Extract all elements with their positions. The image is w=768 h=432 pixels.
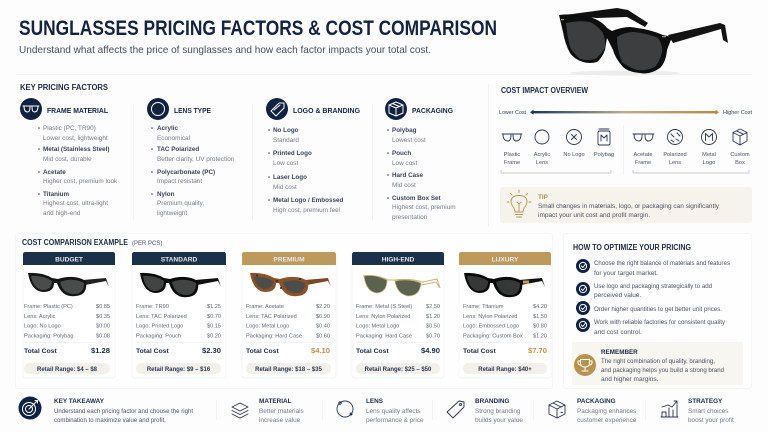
icon: glasses <box>20 98 42 120</box>
card: premium: Lens: TAC Polarized <box>246 314 297 320</box>
list: frame options <box>38 125 118 217</box>
card: high-end: $4.90 <box>421 346 440 355</box>
card: standard: Packaging: Pouch <box>136 334 181 340</box>
callout: tip: impact your unit cost and profit margin. <box>538 212 650 219</box>
footer strip: material: MATERIAL <box>259 398 292 405</box>
icon: light bulb <box>507 190 531 217</box>
card: premium: Packaging: Hard Case <box>246 334 302 340</box>
card: luxury: $1.50 <box>533 314 547 320</box>
icon: target <box>18 396 42 420</box>
card: high-end: Frame: Metal (S.Steel) <box>356 304 412 310</box>
list: packaging options: Mid cost <box>392 182 416 189</box>
card: high-end: $0.50 <box>426 324 440 330</box>
footer strip: lens: performance & price <box>366 417 424 424</box>
list: logo options: Printed Logo <box>273 150 312 157</box>
card: luxury: $7.70 <box>528 346 547 355</box>
footer strip: branding: BRANDING <box>475 398 509 405</box>
footer strip: key takeaway: combination to maximize value and profit. <box>54 417 166 424</box>
card: budget: BUDGET <box>55 256 83 263</box>
callout: remember: and higher margins. <box>601 376 659 383</box>
footer strip: lens: LENS <box>366 398 384 405</box>
heading: lens type: LENS TYPE <box>174 106 211 115</box>
icon: tag <box>266 98 288 120</box>
card: premium <box>242 252 336 378</box>
list: logo options: Metal Logo / Embossed <box>273 197 343 204</box>
card: standard: $0.20 <box>207 334 221 340</box>
card: budget: Frame: Plastic (PC) <box>24 304 73 310</box>
card: budget: Packaging: Polybag <box>24 334 73 340</box>
checklist: perceived value. <box>594 292 642 299</box>
callout: remember: The right combination of quality, branding, <box>601 358 715 365</box>
list: frame options: Lower cost, lightweight <box>43 135 108 142</box>
card: standard: Retail Range: $9 – $16 <box>147 367 211 373</box>
footer strip: packaging: Packaging enhances <box>577 408 636 415</box>
card: premium: $2.20 <box>316 304 330 310</box>
list: lens options: lightweight <box>157 210 187 217</box>
lower cost icons: Polybag <box>594 152 614 158</box>
higher cost icons: Acetate <box>634 152 652 158</box>
list: packaging options: Hard Case <box>392 172 424 179</box>
callout: remember: and packaging helps you build a strong brand <box>601 367 724 374</box>
card: budget: $0.85 <box>96 304 110 310</box>
list: logo options: High cost, premium feel <box>273 207 340 214</box>
panel: lens type <box>147 98 235 217</box>
card: high-end: HIGH-END <box>382 256 415 263</box>
heading: logo and branding: LOGO & BRANDING <box>293 106 360 115</box>
list: frame options: Higher cost, premium look <box>43 178 118 185</box>
panel: how to optimize your pricing <box>564 234 752 388</box>
card: premium: Frame: Acetate <box>246 304 284 310</box>
card: standard: Total Cost <box>136 348 169 355</box>
checklist: Order higher quantities to get better unit prices. <box>594 306 722 313</box>
card: luxury: $4.20 <box>533 304 547 310</box>
footer strip: packaging: customer experience <box>577 417 637 424</box>
list: frame options: Highest cost, ultra-light <box>43 200 108 207</box>
card: premium: $0.90 <box>316 314 330 320</box>
heading: frame material: FRAME MATERIAL <box>47 106 108 115</box>
card: standard: STANDARD <box>161 256 197 263</box>
higher cost icons <box>633 129 750 173</box>
heading: packaging: PACKAGING <box>412 106 453 115</box>
list: packaging options: Low cost <box>392 160 417 167</box>
list: packaging options: presentation <box>392 214 428 221</box>
icon: tag <box>447 401 464 418</box>
list: packaging options: Highest cost, premium <box>392 204 456 211</box>
list: lens options: Economical <box>157 135 190 142</box>
callout: remember <box>572 342 743 385</box>
footer strip: material: Better materials <box>259 408 304 415</box>
list: logo options: Mid cost <box>273 184 297 191</box>
card: luxury: Logo: Embossed Logo <box>463 324 519 330</box>
footer strip: branding: builds your value <box>475 417 523 424</box>
sunglasses: premium <box>250 273 331 296</box>
footer strip: strategy: Smart choices <box>688 408 728 415</box>
card: budget: Total Cost <box>24 348 57 355</box>
callout: remember: REMEMBER <box>601 349 638 356</box>
callout: tip: Small changes in materials, logo, or packaging can significantly <box>538 203 720 210</box>
list: lens options: Polycarbonate (PC) <box>157 169 215 176</box>
sunglasses: standard <box>140 273 221 297</box>
title: SUNGLASSES PRICING FACTORS & COST COMPARISON <box>19 17 497 40</box>
list: lens options: Acrylic <box>157 125 179 132</box>
checklist: for your target market. <box>594 270 658 277</box>
card: luxury: Frame: Titanium <box>463 304 504 310</box>
icon: growth chart <box>661 401 678 417</box>
list: packaging options: Polybag <box>392 127 417 134</box>
callout: tip <box>500 187 752 223</box>
card: premium: PREMIUM <box>273 256 305 263</box>
card: standard <box>132 252 226 378</box>
card: high-end: $0.70 <box>426 334 440 340</box>
heading: cost comparison example: COST COMPARISON EXAMPLE <box>22 238 129 247</box>
footer strip: material <box>232 398 304 424</box>
footer strip: key takeaway <box>18 396 193 424</box>
card: budget: Logo: No Logo <box>24 324 61 330</box>
footer strip: branding <box>447 398 523 424</box>
higher cost icons: Frame <box>635 160 651 166</box>
lower cost icons: Plastic <box>504 152 520 158</box>
list: frame options: Mid cost, durable <box>43 156 92 163</box>
card: high-end: Total Cost <box>356 348 389 355</box>
card: budget: $0.08 <box>96 334 110 340</box>
lower cost icons: Acrylic <box>534 152 550 158</box>
list: logo options: Low cost <box>273 160 298 167</box>
list: logo options: Laser Logo <box>273 174 307 181</box>
icon: lens <box>337 401 353 417</box>
card: luxury: LUXURY <box>492 256 519 263</box>
higher cost icons: Logo <box>703 160 715 166</box>
card: budget <box>23 252 115 378</box>
higher cost icons: Box <box>735 160 745 166</box>
card: luxury: Packaging: Custom Box <box>463 334 523 340</box>
card: luxury <box>459 252 551 378</box>
card: standard: Lens: TAC Polarized <box>136 314 187 320</box>
card: high-end: Packaging: Hard Case <box>356 334 412 340</box>
list: lens options: Impact resistant <box>157 178 202 185</box>
footer strip: lens: Lens quality affects <box>366 408 421 415</box>
card: standard: Frame: TR90 <box>136 304 169 310</box>
higher cost icons: Metal <box>702 152 716 158</box>
icon: box <box>549 401 565 418</box>
list: frame options: Metal (Stainless Steel) <box>43 146 110 153</box>
card: budget: Retail Range: $4 – $8 <box>37 367 98 373</box>
card: premium: Retail Range: $18 – $35 <box>255 367 323 373</box>
checklist <box>576 259 731 336</box>
sunglasses: budget <box>28 273 109 296</box>
list: logo options: Standard <box>273 137 299 144</box>
panel: packaging <box>385 98 456 221</box>
footer strip: key takeaway: Understand each pricing factor and choose the right <box>54 408 193 415</box>
card: luxury: $1.20 <box>533 334 547 340</box>
footer strip: strategy <box>661 398 734 424</box>
checklist: and cost control. <box>594 329 642 336</box>
lower cost icons: Frame <box>504 160 520 166</box>
card: luxury: Lens: Nylon Polarized <box>463 314 517 320</box>
card: high-end: Logo: Metal Logo <box>356 324 399 330</box>
heading: how to optimize: HOW TO OPTIMIZE YOUR PRICING <box>573 243 691 252</box>
card: high-end: Retail Range: $25 – $50 <box>365 367 432 373</box>
list: lens options: Better clarity, UV protection <box>157 156 235 163</box>
footer strip: strategy: STRATEGY <box>688 398 723 405</box>
card: premium: Total Cost <box>246 348 279 355</box>
icon: trophy <box>574 354 596 376</box>
panel: frame material <box>20 98 118 217</box>
icon: box <box>385 98 407 120</box>
card: standard: $2.30 <box>202 346 221 355</box>
list: packaging options: Custom Box Set <box>392 195 442 202</box>
footer strip: packaging <box>549 398 637 424</box>
card: budget: $0.00 <box>96 324 110 330</box>
card: luxury: Total Cost <box>463 348 496 355</box>
list: lens options <box>151 125 235 217</box>
card: luxury: Retail Range: $40+ <box>478 367 532 373</box>
higher cost icons: Polarized <box>663 152 687 158</box>
card: premium: $0.60 <box>316 334 330 340</box>
cost scale arrow: Higher Cost <box>723 110 752 116</box>
footer strip: branding: Strong branding <box>475 408 521 415</box>
footer strip: strategy: boost your profit <box>688 417 734 424</box>
sunglasses: luxury <box>464 273 545 297</box>
checklist: Use logo and packaging strategically to add <box>594 283 712 290</box>
heading: cost impact overview: COST IMPACT OVERVIEW <box>501 86 588 95</box>
cost scale arrow <box>499 110 752 116</box>
icon: lens <box>147 98 169 120</box>
list: logo options <box>268 127 343 214</box>
checklist: Choose the right balance of materials and features <box>594 260 731 267</box>
card: budget: $0.35 <box>96 314 110 320</box>
list: packaging options <box>387 127 456 221</box>
card: high-end: $1.20 <box>426 314 440 320</box>
list: frame options: Acetate <box>43 169 66 176</box>
card: premium: $4.10 <box>311 346 330 355</box>
cost scale arrow: Lower Cost <box>499 110 526 116</box>
footer strip: key takeaway: KEY TAKEAWAY <box>54 398 105 405</box>
sunglasses: high-end <box>363 276 440 296</box>
list: lens options: TAC Polarized <box>157 146 199 153</box>
list: lens options: Nylon <box>157 191 175 198</box>
list: frame options: Titanium <box>43 191 70 198</box>
card: high-end: Lens: Nylon Polarized <box>356 314 410 320</box>
card: premium: $0.40 <box>316 324 330 330</box>
list: lens options: Premium quality, <box>157 200 204 207</box>
list: logo options: No Logo <box>273 127 299 134</box>
panel: logo and branding <box>266 98 360 214</box>
list: packaging options: Lowest cost <box>392 137 426 144</box>
lower cost icons <box>501 129 614 173</box>
card: budget: $1.28 <box>91 346 110 355</box>
footer strip: packaging: PACKAGING <box>577 398 616 405</box>
footer strip: material: increase value <box>259 417 301 424</box>
list: frame options: and high-end <box>43 210 81 217</box>
icon: layers <box>232 403 248 418</box>
card: budget: Lens: Acrylic <box>24 314 56 320</box>
higher cost icons: Custom <box>730 152 750 158</box>
panel: cost impact overview <box>499 86 752 223</box>
callout: tip: TIP <box>538 194 549 201</box>
card: standard: $0.70 <box>207 314 221 320</box>
card: luxury: $0.80 <box>533 324 547 330</box>
list: frame options: Plastic (PC, TR90) <box>43 125 96 132</box>
per pcs note: (PER PCS) <box>132 241 162 247</box>
subtitle: Understand what affects the price of sunglasses and how each factor impacts your total cost. <box>19 45 431 56</box>
card: high-end <box>352 252 444 378</box>
higher cost icons: Lens <box>669 160 681 166</box>
lower cost icons: No Logo <box>563 152 585 158</box>
lower cost icons: Lens <box>536 160 548 166</box>
card: standard: $1.25 <box>207 304 221 310</box>
card: premium: Logo: Metal Logo <box>246 324 289 330</box>
card: high-end: $2.50 <box>426 304 440 310</box>
panel: cost comparison example <box>16 234 552 388</box>
checklist: Work with reliable factories for consistent quality <box>594 319 726 326</box>
list: packaging options: Pouch <box>392 150 411 157</box>
hero sunglasses photo <box>559 8 728 76</box>
card: standard: Logo: Printed Logo <box>136 324 183 330</box>
footer strip: lens <box>337 398 424 424</box>
section heading: key pricing factors: KEY PRICING FACTORS <box>20 83 109 92</box>
card: standard: $0.15 <box>207 324 221 330</box>
